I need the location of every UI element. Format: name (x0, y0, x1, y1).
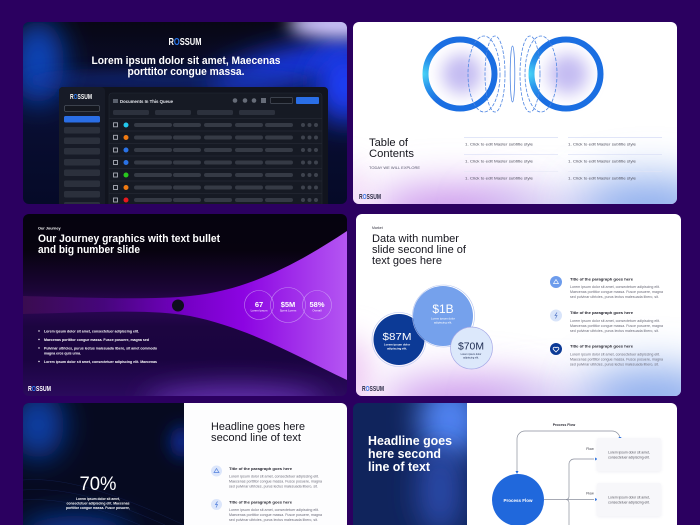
logo: ROSSUM (359, 192, 381, 201)
heading (369, 138, 414, 157)
panel: journey slide (23, 214, 347, 396)
bullet list: Lorem ipsum dolor sit amet, consectetuer adipiscing elit. Maecenas (44, 359, 157, 364)
bubble chart: Lorem ipsum dolor (384, 342, 411, 346)
logo: ROSSUM (362, 384, 384, 393)
flow card (597, 483, 661, 517)
bubble chart: Lorem ipsum dolor (461, 353, 482, 356)
icon list: Title of the paragraph goes here (570, 278, 633, 282)
flow card: consectetuer adipiscing elit. (608, 500, 650, 504)
headline (92, 55, 280, 78)
sidebar logo: ROSSUM (70, 94, 92, 101)
bullet list: Pulvinar ultricies, purus lectus malesuada libero, sit amet commodo (44, 346, 158, 350)
panel: dashboard cover slide (23, 22, 347, 204)
bullet list (38, 328, 158, 364)
icon list: Lorem ipsum dolor sit amet, consectetuer adipiscing elit. (570, 285, 660, 289)
bullet list: Lorem ipsum dolor sit amet, consectetuer adipiscing elit. (44, 328, 139, 334)
icon list: Title of the paragraph goes here (570, 344, 633, 348)
heading: Our Journey graphics with text bullet (38, 233, 220, 245)
heading: text goes here (372, 255, 442, 267)
stat circles (244, 288, 332, 322)
caption: Lorem ipsum dolor sit amet, (76, 497, 120, 501)
bubble chart (372, 285, 492, 369)
contents list: 1. Click to edit Master subtitle style (465, 142, 534, 146)
icon list: sed pulvinar ultricies, purus lectus malesuada libero, sit. (570, 362, 659, 366)
subheading: TODAY WE WILL EXPLORE (369, 166, 420, 170)
icon list: Maecenas porttitor congue massa. Fusce posuere, magna (570, 290, 663, 294)
queue table: Documents In This Queue (120, 99, 174, 104)
heading: Headline goes here (211, 421, 305, 433)
heading (368, 436, 452, 471)
process circle label: Process Flow (503, 498, 533, 503)
flow card: Lorem ipsum dolor sit amet, (608, 450, 650, 454)
heading: slide second line of (372, 244, 467, 256)
icon list: sed pulvinar ultricies, purus lectus malesuada libero, sit. (229, 484, 318, 488)
bubble chart: adipiscing elit. (434, 320, 452, 324)
panel: process flow slide (353, 403, 677, 525)
eyebrow: Our Journey (38, 226, 61, 230)
bubble chart: Lorem ipsum dolor (431, 316, 455, 320)
icon list: sed pulvinar ultricies, purus lectus malesuada libero, sit. (570, 329, 659, 333)
heading: Table of (369, 137, 409, 149)
logo: ROSSUM (168, 37, 202, 48)
icon list: Lorem ipsum dolor sit amet, consectetuer adipiscing elit. (229, 508, 319, 512)
stat circles: Spent Lorem (280, 308, 297, 312)
heading (38, 233, 220, 256)
heading: Contents (369, 148, 415, 160)
icon list: Lorem ipsum dolor sit amet, consectetuer adipiscing elit. (570, 352, 660, 356)
flow label: Flow (586, 492, 594, 496)
process circle (492, 474, 544, 525)
stat circles: $5M (281, 300, 295, 309)
bullet list: Maecenas porttitor congue massa. Fusce posuere, magna sed (44, 337, 150, 342)
heading (211, 422, 305, 441)
headline: Lorem ipsum dolor sit amet, Maecenas (92, 55, 280, 67)
flow card (597, 438, 661, 472)
contents list: 1. Click to edit Master subtitle style (465, 176, 534, 180)
heading: Headline goes (368, 434, 452, 448)
stat circles: Lorem Ipsum (251, 308, 268, 312)
flow diagram (492, 423, 661, 525)
flow card: consectetuer adipiscing elit. (608, 456, 650, 460)
icon list (550, 276, 663, 366)
dashboard mockup (59, 87, 328, 217)
stat circles: Overall (312, 308, 322, 312)
caption: consectetuer adipiscing elit. Maecenas (66, 502, 130, 506)
caption (66, 497, 130, 510)
sidebar menu (64, 106, 100, 208)
heading: second line of text (211, 432, 301, 444)
bullet list: magna eros quis urna. (44, 350, 81, 356)
bubble chart: $70M (458, 342, 484, 352)
icon list: Lorem ipsum dolor sit amet, consectetuer adipiscing elit. (229, 474, 319, 478)
contents list: 1. Click to edit Master subtitle style (568, 176, 637, 180)
heading: Data with number (372, 233, 459, 245)
big number: 70% (80, 474, 117, 495)
panel: data with numbers slide (356, 214, 681, 396)
panel: table of contents slide (353, 22, 677, 204)
contents list: 1. Click to edit Master subtitle style (568, 142, 637, 146)
icon list: Maecenas porttitor congue massa. Fusce posuere, magna (229, 480, 322, 484)
icon list: Title of the paragraph goes here (570, 311, 633, 315)
icon list: Title of the paragraph goes here (229, 467, 292, 471)
icon list (211, 466, 322, 522)
stat circles: 58% (309, 300, 325, 309)
flow label: Process Flow (553, 423, 576, 427)
flow card: Lorem ipsum dolor sit amet, (608, 496, 650, 500)
headline: porttitor congue massa. (128, 66, 244, 78)
heading: line of text (368, 460, 431, 474)
heading: here second (368, 447, 441, 461)
icon list: Maecenas porttitor congue massa. Fusce posuere, magna (229, 513, 322, 517)
queue table (109, 93, 322, 217)
stat circles: 67 (255, 300, 263, 309)
icon list: Lorem ipsum dolor sit amet, consectetuer adipiscing elit. (570, 319, 660, 323)
contents list: 1. Click to edit Master subtitle style (568, 158, 637, 164)
bubble chart: $1B (432, 302, 454, 316)
heading: and big number slide (38, 244, 140, 256)
funnel graphic (23, 231, 347, 380)
bubble chart: $87M (382, 331, 412, 343)
panel: 70% statistic slide (23, 403, 347, 525)
ring graphic (426, 36, 600, 112)
centre dot (172, 300, 184, 312)
bubble chart: adipiscing elit. (463, 356, 479, 360)
flow label: Flow (586, 447, 594, 451)
logo: ROSSUM (28, 384, 51, 393)
icon list: sed pulvinar ultricies, purus lectus malesuada libero, sit. (570, 295, 659, 299)
heading (372, 233, 467, 267)
bubble chart: adipiscing elit. (387, 346, 407, 350)
contents list: 1. Click to edit Master subtitle style (465, 158, 534, 164)
icon list: Maecenas porttitor congue massa. Fusce posuere, magna (570, 324, 663, 328)
caption: porttitor congue massa. Fusce posuere, (66, 506, 130, 510)
contents list (464, 137, 662, 180)
icon list: Title of the paragraph goes here (229, 500, 292, 504)
icon list: Maecenas porttitor congue massa. Fusce posuere, magna (570, 358, 663, 362)
icon list: sed pulvinar ultricies, purus lectus malesuada libero, sit. (229, 518, 318, 522)
eyebrow: Market (372, 226, 383, 230)
